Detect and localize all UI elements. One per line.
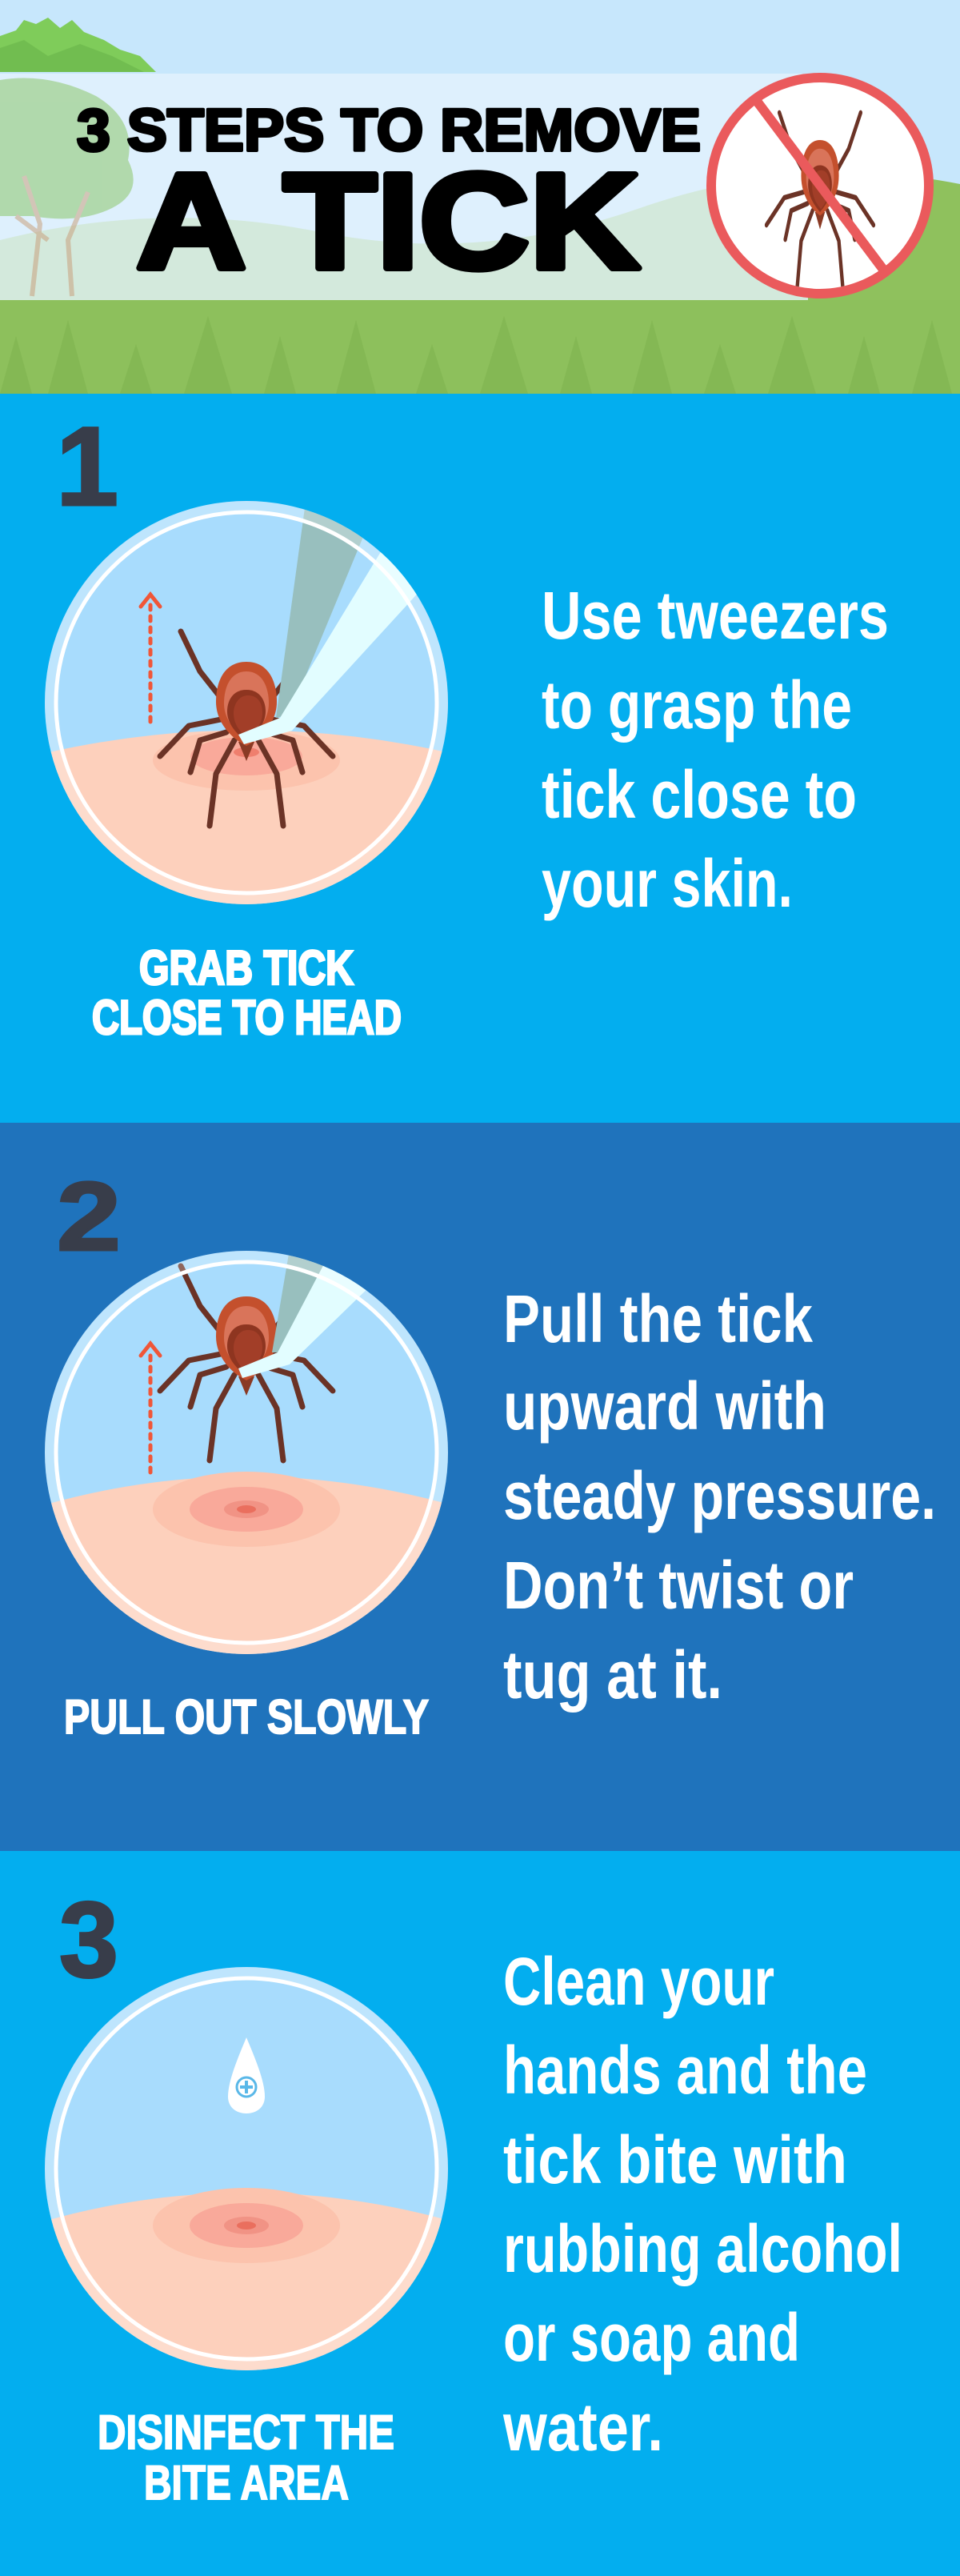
- text: step 3 instructions: water.: [502, 2390, 663, 2465]
- illustration: disinfect: [32, 1961, 464, 2377]
- text: step 2 instructions: Pull the tick: [503, 1281, 813, 1356]
- step number 2: 2: [57, 1162, 121, 1271]
- text: step 2 instructions: tug at it.: [503, 1637, 722, 1713]
- illustration: grab tick: [32, 496, 464, 912]
- text: step 3 instructions: Clean your: [503, 1944, 774, 2019]
- header: outdoor scene: [0, 0, 960, 394]
- text: step 2 instructions: Don’t twist or: [503, 1548, 854, 1623]
- tree faded: [0, 78, 134, 296]
- title band: [0, 74, 808, 300]
- panel: step 1: [45, 427, 886, 1036]
- step number 1: 1: [56, 403, 118, 529]
- arrow: pull up: [141, 1344, 160, 1472]
- label: grab tick: [92, 941, 402, 1044]
- title text: [77, 97, 701, 298]
- label: disinfect the bite area: [98, 2406, 394, 2510]
- icon: no-tick sign: [711, 78, 929, 294]
- label: pull out slowly: PULL OUT SLOWLY: [64, 1690, 429, 1744]
- text: step 1 instructions: your skin.: [542, 846, 793, 921]
- text: step 2 instructions: upward with: [503, 1368, 826, 1444]
- text: step 3 instructions: [502, 1944, 902, 2465]
- text: step 1 instructions: tick close to: [542, 757, 857, 832]
- panel: step 3: [45, 1900, 899, 2500]
- label: disinfect the bite area: DISINFECT THE: [98, 2406, 394, 2459]
- text: step 3 instructions: or soap and: [503, 2300, 800, 2375]
- title text: A TICK: [136, 146, 640, 298]
- text: step 1 instructions: [542, 578, 889, 921]
- text: step 3 instructions: tick bite with: [503, 2122, 847, 2197]
- text: step 1 instructions: to grasp the: [542, 667, 852, 743]
- text: step 2 instructions: [503, 1281, 936, 1713]
- step number 3: 3: [59, 1881, 118, 2000]
- icon: disinfectant drop: [228, 2037, 265, 2113]
- label: disinfect the bite area: BITE AREA: [144, 2456, 349, 2510]
- illustration: pull out: [45, 1251, 448, 1654]
- arrow: pull up: [141, 595, 160, 722]
- panel: step 2: [0, 1123, 960, 1851]
- text: step 1 instructions: Use tweezers: [542, 578, 889, 653]
- title text: 3 STEPS TO REMOVE: [77, 97, 701, 163]
- text: step 3 instructions: hands and the: [503, 2033, 867, 2108]
- label: grab tick: GRAB TICK: [139, 941, 354, 995]
- label: grab tick: CLOSE TO HEAD: [92, 991, 402, 1044]
